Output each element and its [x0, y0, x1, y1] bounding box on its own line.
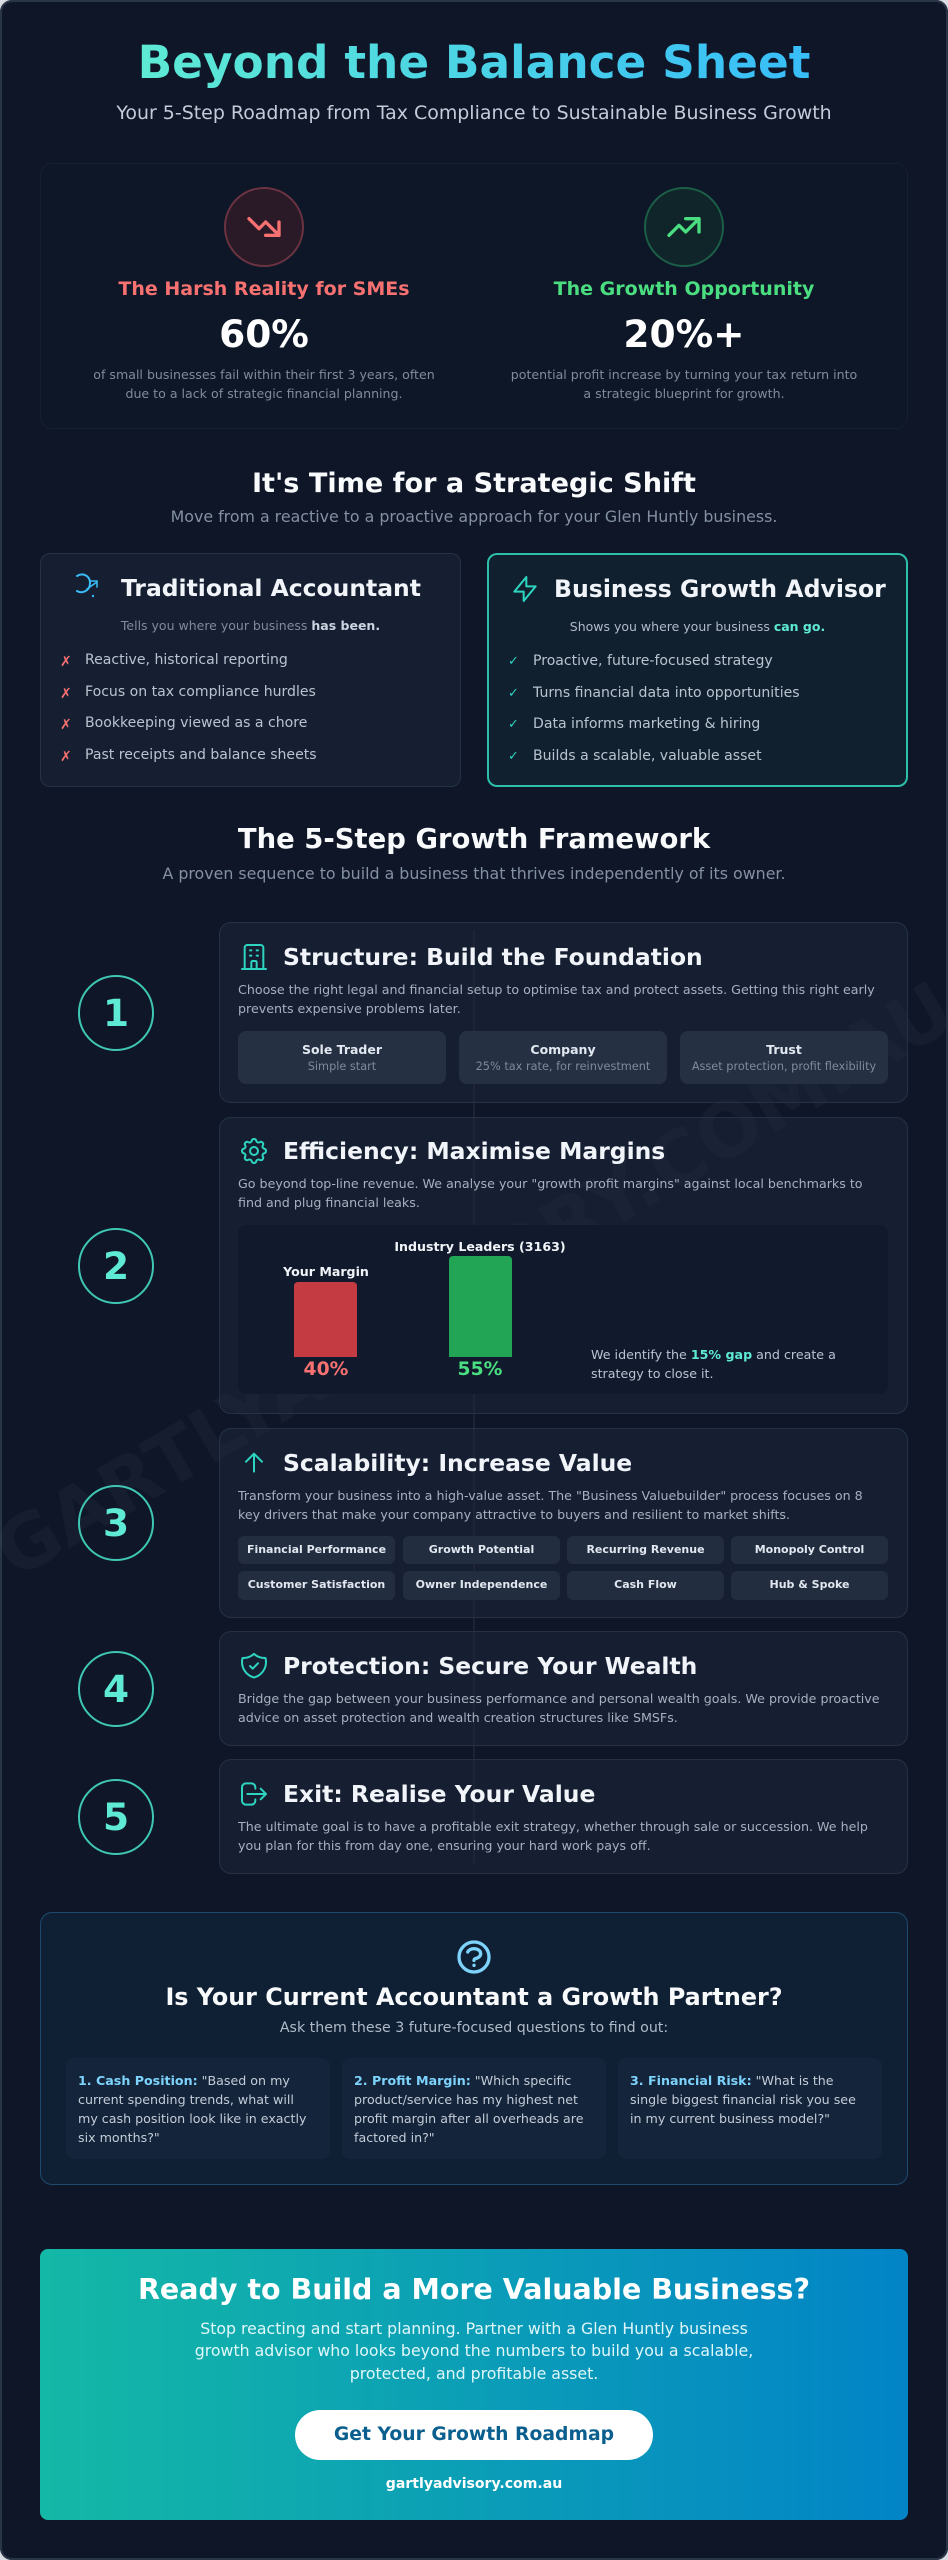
text: protection	[238, 1690, 880, 1724]
list: traditional traits	[60, 652, 317, 765]
text: cta: protected, and profitable asset.	[350, 2364, 598, 2383]
option: trust	[680, 1031, 888, 1084]
question 3: single biggest financial risk you see	[630, 2092, 856, 2106]
option: sole trader	[238, 1031, 446, 1084]
text: scalability: key drivers that make your company attractive to buyers and resilient to market shifts.	[238, 1506, 790, 1522]
text: cta	[195, 2319, 753, 2383]
text: growth stat	[511, 367, 857, 401]
question 2: factored in?"	[354, 2130, 435, 2144]
heading: protection: Protection: Secure Your Wealth	[283, 1652, 697, 1680]
step number 2: 2	[103, 1244, 129, 1288]
text: scalability	[238, 1488, 863, 1522]
list: advisor traits: Turns financial data into opportunities	[533, 684, 800, 700]
option: trust: Asset protection, profit flexibility	[692, 1060, 876, 1073]
panel: call to action	[40, 2249, 908, 2520]
option: company: Company	[530, 1042, 596, 1057]
panel: growth partner questions	[40, 1912, 908, 2185]
value drivers grid: Hub & Spoke	[770, 1578, 850, 1591]
heading: traditional accountant: Traditional Accountant	[121, 574, 421, 602]
value drivers grid: Cash Flow	[614, 1578, 677, 1591]
text: growth stat: a strategic blueprint for growth.	[583, 386, 785, 401]
heading: growth partner: Is Your Current Accountant a Growth Partner?	[165, 1982, 783, 2010]
text: exit: The ultimate goal is to have a profitable exit strategy, whether through sale or succession. We help	[238, 1818, 868, 1834]
subheading: strategic shift: Move from a reactive to a proactive approach for your Glen Huntly business.	[171, 507, 777, 526]
text: cta: Stop reacting and start planning. Partner with a Glen Huntly business	[200, 2319, 748, 2338]
value drivers grid	[238, 1536, 888, 1600]
step number 5	[78, 1779, 154, 1855]
text: cta: growth advisor who looks beyond the numbers to build you a scalable,	[195, 2341, 753, 2360]
text: failure stat: of small businesses fail within their first 3 years, often	[93, 367, 435, 382]
bar: your margin	[294, 1282, 357, 1357]
heading: framework: The 5-Step Growth Framework	[238, 824, 710, 855]
button	[295, 2410, 653, 2460]
text: gap note: We identify the 15% gap and create a	[591, 1346, 836, 1362]
text: growth stat: potential profit increase by turning your tax return into	[511, 367, 857, 382]
timeline line	[473, 930, 475, 1865]
question 1: my cash position look like in exactly	[78, 2110, 306, 2126]
question 2	[342, 2058, 606, 2159]
panel: traditional accountant	[40, 553, 461, 787]
icon: building	[241, 944, 267, 970]
list: traditional traits: Past receipts and balance sheets	[85, 746, 317, 762]
text: efficiency: Go beyond top-line revenue. We analyse your "growth profit margins" against local benchmarks to	[238, 1176, 863, 1190]
heading: efficiency: Efficiency: Maximise Margins	[283, 1137, 665, 1165]
text: can go: Shows you where your business can go.	[570, 619, 825, 634]
text: gap note: strategy to close it.	[591, 1366, 714, 1380]
icon: question	[457, 1940, 491, 1974]
list: advisor traits	[508, 653, 800, 764]
question 3: in my current business model?"	[630, 2110, 830, 2126]
option: company	[459, 1031, 667, 1084]
question 2: profit margin after all overheads are	[354, 2110, 584, 2126]
value drivers grid: Financial Performance	[247, 1543, 386, 1556]
panel: stats	[40, 163, 908, 429]
list: traditional traits: ✗	[60, 686, 72, 702]
panel: step 1 structure	[219, 922, 908, 1103]
icon: shield	[241, 1652, 267, 1678]
list: traditional traits: Bookkeeping viewed as a chore	[85, 715, 307, 731]
step number 3: 3	[103, 1501, 129, 1545]
heading: business growth advisor: Business Growth Advisor	[554, 575, 886, 603]
question 1: current spending trends, what will	[78, 2092, 294, 2106]
step number 2	[78, 1228, 154, 1304]
question 2: product/service has my highest net	[354, 2092, 578, 2106]
heading: cta: Ready to Build a More Valuable Business?	[138, 2273, 810, 2306]
list: advisor traits: ✓	[508, 654, 519, 669]
option: trust: Trust	[766, 1042, 802, 1057]
heading: scalability: Scalability: Increase Value	[283, 1449, 632, 1477]
panel: step 4 protection	[219, 1631, 908, 1746]
text: scalability: Transform your business into a high-value asset. The "Business Valuebuilder" process focuses on 8	[238, 1488, 863, 1502]
step number 4	[78, 1651, 154, 1727]
label: industry leaders: Industry Leaders (3163)	[394, 1239, 566, 1254]
heading: exit: Exit: Realise Your Value	[283, 1780, 595, 1808]
question 3	[618, 2058, 882, 2159]
chart: margin comparison	[238, 1225, 888, 1394]
value: 40%: 40%	[304, 1359, 348, 1380]
text: gap note	[591, 1346, 836, 1380]
question 2: 2. Profit Margin: "Which specific	[354, 2072, 571, 2088]
option: sole trader: Simple start	[308, 1060, 376, 1073]
text: structure	[238, 982, 875, 1016]
step number 1	[78, 975, 154, 1051]
value drivers grid: Customer Satisfaction	[248, 1578, 385, 1591]
icon: cog	[241, 1138, 267, 1164]
question 1: six months?"	[78, 2130, 160, 2144]
step number 5: 5	[103, 1795, 129, 1839]
icon: trending up	[644, 187, 724, 267]
text: efficiency	[238, 1176, 863, 1210]
list: traditional traits: Reactive, historical reporting	[85, 652, 288, 668]
bar: industry leaders	[449, 1256, 512, 1357]
panel: step 3 scalability	[219, 1428, 908, 1618]
list: advisor traits: ✓	[508, 686, 519, 701]
step number 3	[78, 1485, 154, 1561]
option: company: 25% tax rate, for reinvestment	[476, 1060, 650, 1073]
list: advisor traits: Proactive, future-focused strategy	[533, 653, 773, 669]
panel: business growth advisor	[487, 553, 908, 787]
panel: step 5 exit	[219, 1759, 908, 1874]
value drivers grid: Owner Independence	[416, 1578, 547, 1591]
icon: trending down	[224, 187, 304, 267]
text: failure stat	[93, 367, 435, 401]
text: efficiency: find and plug financial leaks.	[238, 1194, 420, 1210]
subheading: framework: A proven sequence to build a business that thrives independently of its owner.	[162, 864, 786, 883]
value drivers grid: Recurring Revenue	[586, 1543, 705, 1556]
list: traditional traits: ✗	[60, 749, 72, 765]
step number 1: 1	[103, 991, 129, 1035]
icon: lightning	[513, 576, 537, 602]
option: sole trader: Sole Trader	[302, 1042, 382, 1057]
icon: circular arrow	[76, 573, 98, 598]
question 1	[66, 2058, 330, 2159]
value drivers grid: Growth Potential	[429, 1543, 534, 1556]
value: 55%: 55%	[458, 1359, 502, 1380]
list: traditional traits: Focus on tax compliance hurdles	[85, 684, 316, 700]
list: traditional traits: ✗	[60, 654, 72, 670]
text: structure: Choose the right legal and financial setup to optimise tax and protect assets. Getting this right early	[238, 982, 875, 996]
text: protection: Bridge the gap between your business performance and personal wealth goals. We provide proactive	[238, 1690, 880, 1706]
step number 4: 4	[103, 1667, 129, 1711]
subtitle: Your 5-Step Roadmap from Tax Compliance to Sustainable Business Growth	[116, 102, 832, 124]
icon: exit	[241, 1782, 267, 1806]
text: exit	[238, 1818, 868, 1852]
website: gartlyadvisory.com.au	[386, 2476, 562, 2492]
heading: growth opportunity: The Growth Opportunity	[554, 278, 814, 300]
stat: 20%+: 20%+	[623, 312, 745, 356]
text: ask them: Ask them these 3 future-focused questions to find out:	[280, 2020, 668, 2036]
list: advisor traits: Data informs marketing & hiring	[533, 716, 760, 732]
heading: harsh reality: The Harsh Reality for SMEs	[118, 278, 410, 300]
question 3: 3. Financial Risk: "What is the	[630, 2072, 834, 2088]
stat: 60%: 60%	[219, 312, 309, 356]
icon: arrow up	[244, 1452, 263, 1473]
value drivers grid: Monopoly Control	[755, 1543, 864, 1556]
title: Beyond the Balance Sheet	[138, 36, 810, 89]
list: advisor traits: Builds a scalable, valuable asset	[533, 748, 762, 764]
text: has been: Tells you where your business has been.	[121, 618, 380, 633]
label: your margin: Your Margin	[283, 1264, 369, 1279]
panel: step 2 efficiency	[219, 1117, 908, 1414]
text: exit: you plan for this from day one, ensuring your hard work pays off.	[238, 1838, 651, 1852]
list: traditional traits: ✗	[60, 717, 72, 733]
text: protection: advice on asset protection and wealth creation structures like SMSFs.	[238, 1710, 678, 1724]
heading: strategic shift: It's Time for a Strategic Shift	[252, 468, 696, 499]
heading: structure: Structure: Build the Foundation	[283, 943, 703, 971]
text: failure stat: due to a lack of strategic financial planning.	[125, 386, 403, 401]
question 1: 1. Cash Position: "Based on my	[78, 2072, 290, 2088]
button: Get Your Growth Roadmap	[334, 2424, 614, 2445]
list: advisor traits: ✓	[508, 749, 519, 764]
list: advisor traits: ✓	[508, 717, 519, 732]
text: structure: prevents expensive problems later.	[238, 1000, 461, 1016]
